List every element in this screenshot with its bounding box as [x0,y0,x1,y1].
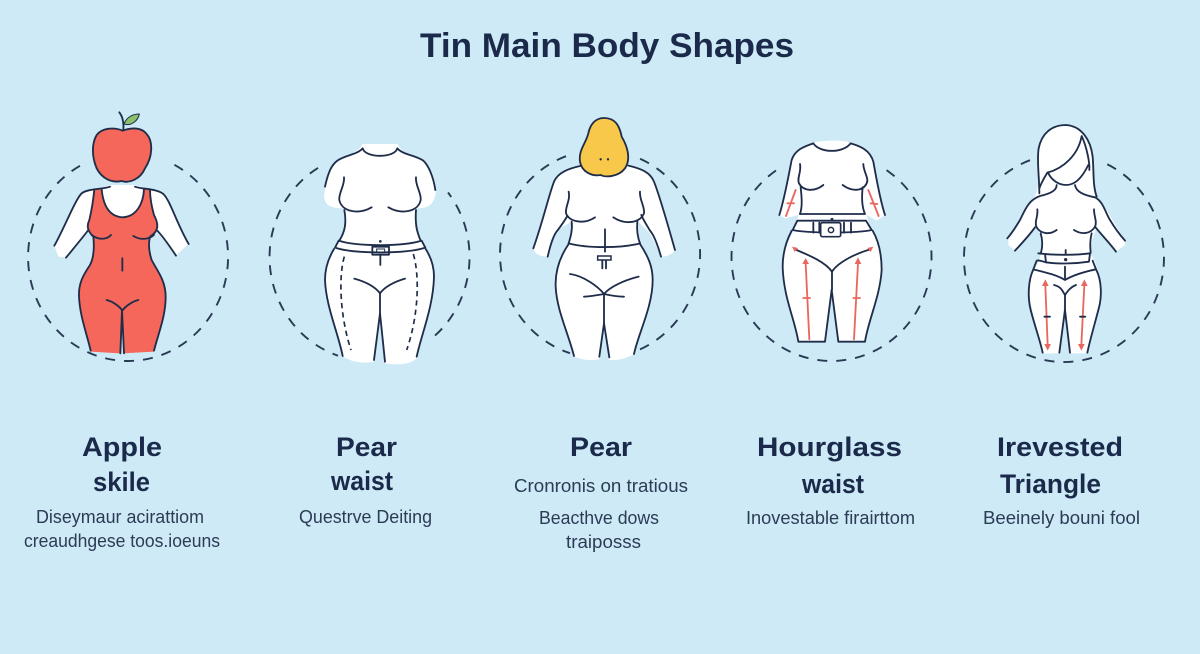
label: inverted triangle: Triangle [1000,469,1101,499]
label: apple: Apple [82,432,162,462]
figure: hourglass body with arrows [779,141,885,342]
label: inverted triangle [983,432,1140,528]
label: hourglass [746,432,915,528]
label: hourglass: Inovestable firairttom [746,508,915,528]
label: pear waist: waist [330,466,393,496]
dashed circle: apple [28,161,228,361]
label: apple: skile [93,467,150,497]
label: pear waist: Pear [336,432,397,462]
figure: apple body [54,112,189,353]
label: apple: creaudhgese toos.ioeuns [24,531,220,551]
label: second pear [514,432,688,552]
dashed circle: pear [270,168,470,356]
dashed circle: second pear [500,156,700,353]
label: apple: Diseymaur acirattiom [36,507,204,527]
label: inverted triangle: Beeinely bouni fool [983,508,1140,528]
pear head [580,118,628,176]
label: pear waist [299,432,432,527]
red arrows [803,263,810,339]
label: second pear: Beacthve dows [539,508,659,528]
title: Tin Main Body Shapes [420,27,794,65]
figure: pear-head body [533,118,675,360]
label: pear waist: Questrve Deiting [299,507,432,527]
label: hourglass: waist [801,469,864,499]
figure: pear body with belt [324,144,436,364]
figure: inverted triangle body with hair [1007,125,1125,353]
label: second pear: traiposss [566,532,641,552]
label: second pear: Pear [570,432,633,462]
label: second pear: Cronronis on tratious [514,476,688,496]
red arrows [1045,285,1048,345]
dashed circle: hourglass [732,170,932,361]
label: hourglass: Hourglass [757,432,902,462]
label: apple [24,432,220,551]
label: inverted triangle: Irevested [997,432,1123,462]
red bodysuit [79,189,166,353]
dashed circle: inverted triangle [964,160,1164,362]
apple head [93,128,151,182]
apple stem and leaf [119,112,123,129]
